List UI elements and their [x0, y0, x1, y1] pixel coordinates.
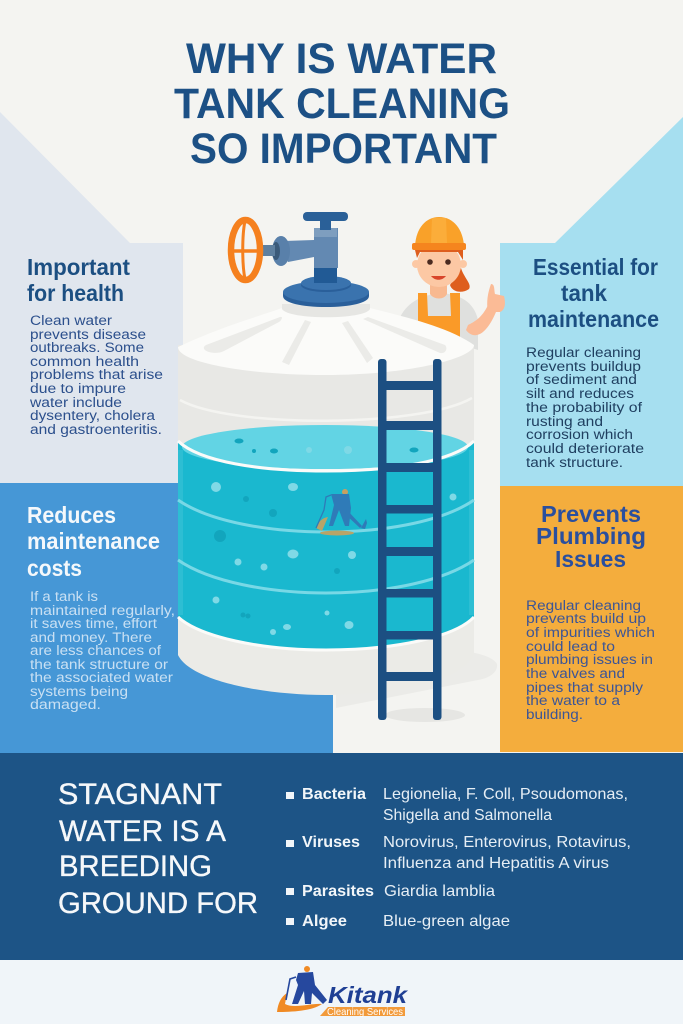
tank dome: [178, 308, 474, 375]
text: health body: common health: [30, 354, 139, 369]
text: maintenance body: the probability of: [526, 400, 642, 415]
list: parasites: Giardia lamblia: [384, 883, 495, 900]
icon: water tank: [178, 308, 497, 722]
text: maintenance body: of sediment and: [526, 372, 637, 387]
heading: important for health: Important: [27, 254, 130, 280]
text: health body: Clean water: [30, 313, 113, 328]
list: algee: Blue-green algae: [383, 913, 510, 930]
text: health body: outbreaks. Some: [30, 340, 144, 355]
list: viruses: Influenza and Hepatitis A virus: [383, 855, 609, 872]
text: plumbing body: of impurities which: [526, 625, 655, 640]
text: maintenance body: corrosion which: [526, 427, 633, 442]
panel: important for health: [0, 112, 183, 483]
text: costs body: are less chances of: [30, 643, 161, 658]
text: health body: due to impure: [30, 381, 126, 396]
list: viruses: Norovirus, Enterovirus, Rotavirus,: [383, 834, 631, 851]
heading: essential for tank maintenance: maintenance: [528, 306, 659, 332]
arm and thumb: [466, 305, 496, 335]
text: health body: problems that arise: [30, 367, 163, 382]
heading: essential for tank maintenance: tank: [561, 280, 607, 306]
heading: stagnant water is a breeding ground for: GROUND FOR: [58, 887, 258, 920]
valve neck collar: [282, 304, 370, 317]
text: costs body: maintained regularly,: [30, 603, 175, 618]
list: parasites: Parasites: [302, 883, 374, 900]
text: maintenance body: [526, 345, 644, 470]
logo: Kitank Cleaning Services: [277, 966, 408, 1018]
list: algee: [286, 913, 510, 930]
list: bacteria: Shigella and Salmonella: [383, 807, 552, 824]
heading: important for health: for health: [27, 280, 124, 306]
list: viruses: [286, 834, 631, 872]
title: TANK CLEANING: [174, 80, 510, 128]
text: plumbing body: Regular cleaning: [526, 598, 641, 613]
ponytail: [450, 268, 470, 292]
panel: stagnant water: [0, 753, 683, 960]
water body: [178, 442, 474, 650]
heading: essential for tank maintenance: [528, 254, 659, 332]
text: maintenance body: rusting and: [526, 414, 603, 429]
heading: essential for tank maintenance: Essential for: [533, 254, 658, 280]
apron: [418, 293, 460, 340]
logo wordmark: Kitank: [328, 982, 408, 1008]
text: costs body: damaged.: [30, 697, 101, 712]
text: costs body: If a tank is: [30, 589, 98, 604]
heading: stagnant water is a breeding ground for: BREEDING: [59, 850, 212, 883]
heading: prevents plumbing issues: [536, 501, 646, 572]
text: costs body: the associated water: [30, 670, 174, 685]
text: health body: [29, 313, 163, 437]
icon: ladder: [378, 359, 442, 720]
text: plumbing body: the water to a: [526, 693, 621, 708]
list: algee: Algee: [302, 913, 347, 930]
heading: reduces maintenance costs: Reduces: [27, 502, 116, 528]
icon: worker: [398, 217, 505, 350]
hard hat: [415, 217, 464, 246]
tank base: [178, 610, 474, 695]
valve flange: [283, 292, 369, 307]
face: [417, 243, 461, 287]
icon: cleaner silhouette in water: [316, 489, 367, 536]
heading: important for health: [27, 254, 130, 306]
title: [174, 35, 510, 173]
list: viruses: Viruses: [302, 834, 360, 851]
heading: stagnant water is a breeding ground for: [58, 778, 258, 920]
neck: [430, 282, 447, 298]
tank ribs: [178, 500, 474, 532]
bubbles: [211, 446, 456, 635]
text: maintenance body: Regular cleaning: [526, 345, 641, 360]
text: costs body: [30, 589, 175, 712]
heading: reduces maintenance costs: maintenance: [27, 528, 160, 554]
panel: prevents plumbing issues: [500, 486, 683, 752]
heading: reduces maintenance costs: costs: [27, 555, 82, 581]
heading: stagnant water is a breeding ground for: WATER IS A: [59, 815, 226, 848]
valve stem and handle: [320, 218, 331, 230]
logo icon: [277, 966, 327, 1012]
valve body: [284, 228, 338, 268]
title: SO IMPORTANT: [190, 125, 497, 173]
heading: prevents plumbing issues: Issues: [555, 546, 626, 572]
heading: prevents plumbing issues: Prevents: [541, 501, 641, 527]
text: health body: and gastroenteritis.: [30, 422, 162, 437]
list: bacteria: [286, 786, 628, 824]
list: bacteria: Legionelia, F. Coll, Psoudomonas,: [383, 786, 628, 803]
list: parasites: [286, 883, 495, 900]
panel: reduces maintenance costs: [0, 483, 333, 753]
text: maintenance body: silt and reduces: [526, 386, 634, 401]
text: plumbing body: the valves and: [526, 666, 625, 681]
logo tagline: Cleaning Services: [327, 1006, 403, 1018]
text: plumbing body: pipes that supply: [526, 680, 643, 695]
text: costs body: and money. There: [30, 630, 152, 645]
text: plumbing body: could lead to: [526, 639, 615, 654]
title: WHY IS WATER: [186, 35, 497, 83]
text: plumbing body: prevents build up: [526, 611, 646, 626]
text: health body: dysentery, cholera: [30, 408, 156, 423]
text: plumbing body: building.: [526, 707, 583, 722]
tank upper body: [178, 345, 474, 450]
icon: valve: [231, 212, 370, 317]
footer band: [0, 960, 683, 1024]
text: plumbing body: plumbing issues in: [526, 652, 653, 667]
text: costs body: it saves time, effort: [30, 616, 157, 631]
list: bacteria: Bacteria: [302, 786, 366, 803]
text: costs body: systems being: [30, 684, 128, 699]
shirt: [398, 293, 478, 350]
heading: prevents plumbing issues: Plumbing: [536, 523, 646, 549]
text: plumbing body: [526, 598, 655, 722]
text: health body: water include: [29, 395, 122, 410]
text: costs body: the tank structure or: [30, 657, 169, 672]
text: maintenance body: could deteriorate: [526, 441, 644, 456]
water surface: [182, 425, 468, 469]
panel: tank maintenance: [500, 117, 683, 486]
orange wheel: [231, 220, 260, 280]
heading: stagnant water is a breeding ground for: STAGNANT: [58, 778, 222, 811]
text: maintenance body: tank structure.: [526, 455, 623, 470]
tank shadow: [336, 652, 497, 708]
text: health body: prevents disease: [30, 327, 146, 342]
text: maintenance body: prevents buildup: [526, 359, 641, 374]
heading: reduces maintenance costs: [27, 502, 160, 581]
